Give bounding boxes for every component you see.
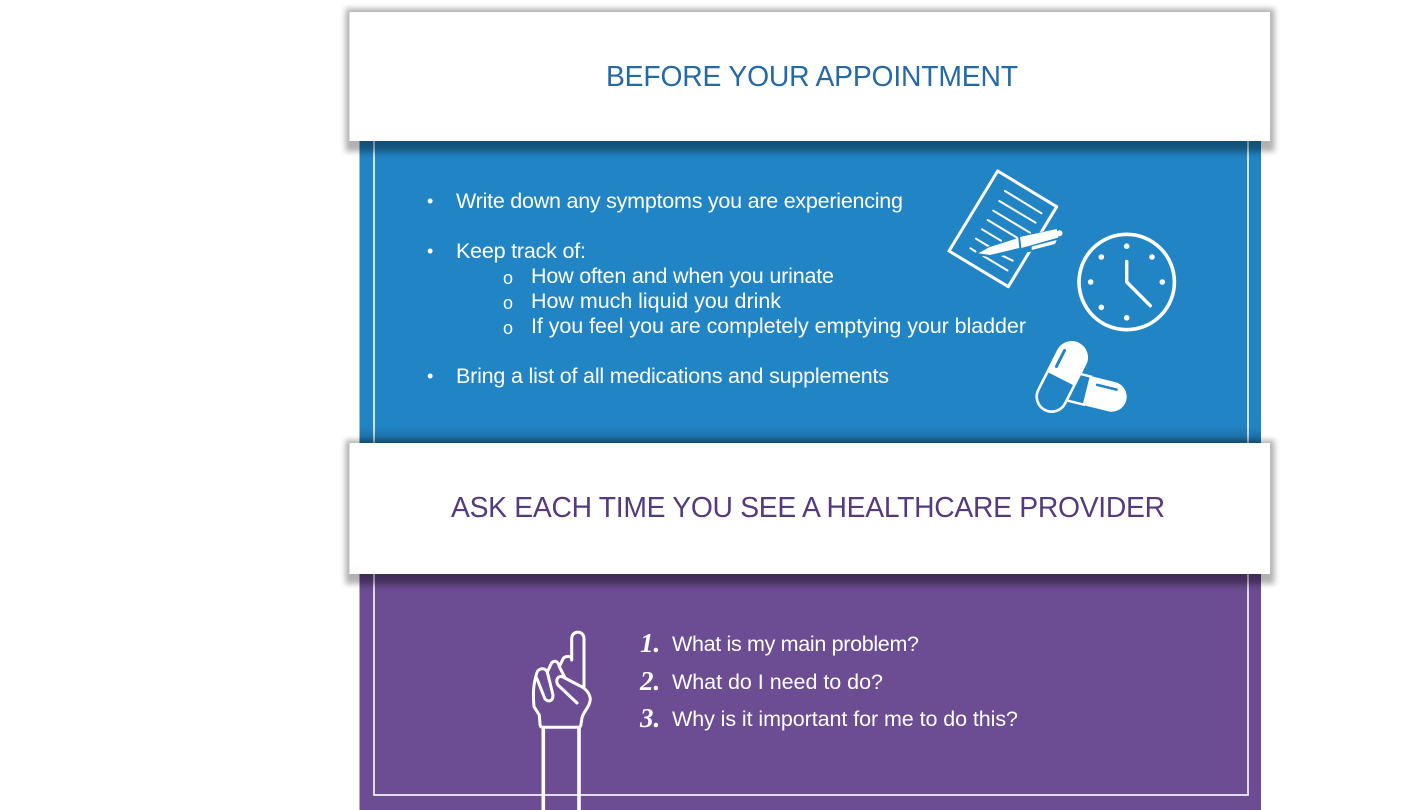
checklist text: How often and when you urinate (531, 264, 834, 288)
checklist text (427, 189, 1026, 388)
checklist text: • (427, 241, 433, 261)
icon: pills (1032, 337, 1130, 417)
checklist text: Write down any symptoms you are experiencing (456, 189, 903, 213)
heading card: before your appointment (350, 12, 1270, 141)
icon: raised finger hand (533, 632, 590, 810)
numbered questions: 3. (639, 703, 660, 733)
numbered questions: 1. (640, 628, 660, 658)
panel: before your appointment (360, 130, 1261, 450)
checklist text: o (503, 318, 513, 338)
checklist text: • (427, 366, 433, 386)
checklist text: o (503, 268, 513, 288)
checklist text: If you feel you are completely emptying your bladder (531, 314, 1026, 338)
numbered questions: 2. (639, 666, 660, 696)
heading card: ask each time (350, 443, 1270, 574)
card shadow: first heading (346, 8, 1274, 152)
checklist text: How much liquid you drink (531, 289, 781, 313)
card shadow: second heading (346, 440, 1274, 584)
numbered questions: Why is it important for me to do this? (672, 707, 1018, 731)
icon: clock (1079, 234, 1174, 330)
heading card: ask each time: ASK EACH TIME YOU SEE A HEALTHCARE PROVIDER (451, 491, 1165, 523)
numbered questions: What do I need to do? (672, 670, 883, 694)
checklist text: • (427, 191, 433, 211)
numbered questions: What is my main problem? (672, 632, 919, 656)
numbered questions (639, 628, 1018, 733)
heading card: before your appointment: BEFORE YOUR APPOINTMENT (606, 60, 1018, 92)
checklist text: Bring a list of all medications and supplements (456, 364, 889, 388)
checklist text: Keep track of: (456, 239, 586, 263)
checklist text: o (503, 293, 513, 313)
icon: notepad and pen (949, 171, 1062, 287)
panel: questions (360, 560, 1261, 810)
